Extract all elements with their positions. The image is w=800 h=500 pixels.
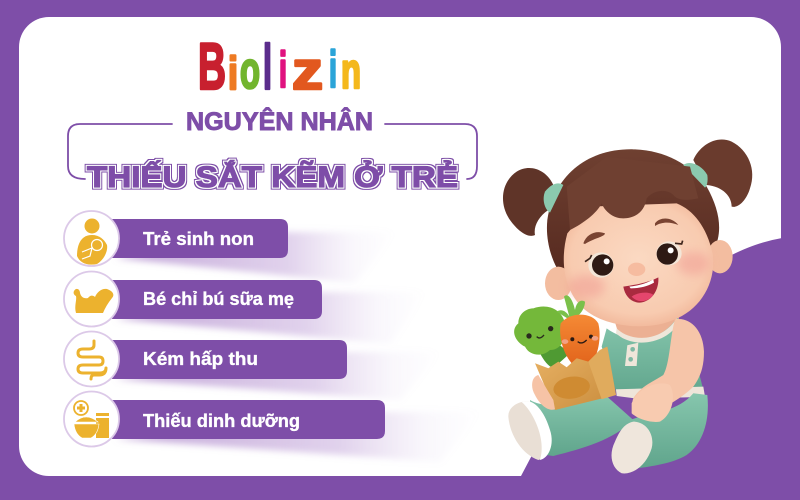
cause row 2 <box>64 272 425 344</box>
carrot <box>557 295 600 365</box>
heading: Nguyên nhân: NGUYÊN NHÂN <box>186 106 373 136</box>
cause row 3: Kém hấp thu <box>143 349 258 369</box>
left eye <box>585 252 614 278</box>
cause row 1 <box>64 211 395 283</box>
far leg and shoe <box>508 393 633 460</box>
near shoe <box>612 422 652 473</box>
illustration: toddler girl with vegetables <box>503 140 752 473</box>
paper bag <box>535 347 616 410</box>
torso <box>602 317 703 397</box>
waist band and collar <box>616 387 705 399</box>
logo: Biolizin <box>198 29 361 103</box>
logo: Biolizin: B <box>198 29 226 103</box>
left hand <box>532 375 555 410</box>
logo: Biolizin: o <box>240 42 260 100</box>
cause row 2: Bé chỉ bú sữa mẹ <box>143 289 294 309</box>
logo: Biolizin: i <box>279 42 287 98</box>
icon: nursing pillow <box>74 289 113 313</box>
right eye <box>656 241 683 265</box>
face <box>564 203 713 326</box>
bangs <box>567 157 698 230</box>
logo: Biolizin: i <box>228 47 238 99</box>
cheeks <box>568 275 605 298</box>
broccoli <box>514 306 570 368</box>
eyebrows <box>583 232 605 244</box>
cause row 1: Trẻ sinh non <box>143 229 254 249</box>
logo: Biolizin: l <box>263 33 272 103</box>
logo: Biolizin: z <box>292 41 323 101</box>
icon: food bowl, cup and plus <box>74 401 109 438</box>
near leg <box>630 393 708 468</box>
hair back <box>547 149 719 280</box>
purple curved corner wedge <box>521 238 800 476</box>
icon: intestine <box>78 341 106 379</box>
icon: mother holding baby <box>77 218 107 265</box>
cause row 4: Thiếu dinh dưỡng <box>143 411 300 431</box>
neck <box>613 310 680 341</box>
right arm <box>632 319 704 415</box>
ears <box>545 267 572 300</box>
hand <box>632 383 673 422</box>
logo: Biolizin: n <box>341 43 361 99</box>
logo: Biolizin: i <box>329 41 337 99</box>
mouth <box>623 277 658 303</box>
left pigtail <box>503 168 553 236</box>
hair ties <box>544 183 563 213</box>
nose <box>628 263 645 276</box>
main title: THIẾU SẮT KẼM Ở TRẺ <box>87 160 458 194</box>
cause row 4 <box>64 392 480 462</box>
heading frame <box>68 124 477 179</box>
right pigtail <box>693 140 752 207</box>
cause row 3 <box>64 332 440 400</box>
